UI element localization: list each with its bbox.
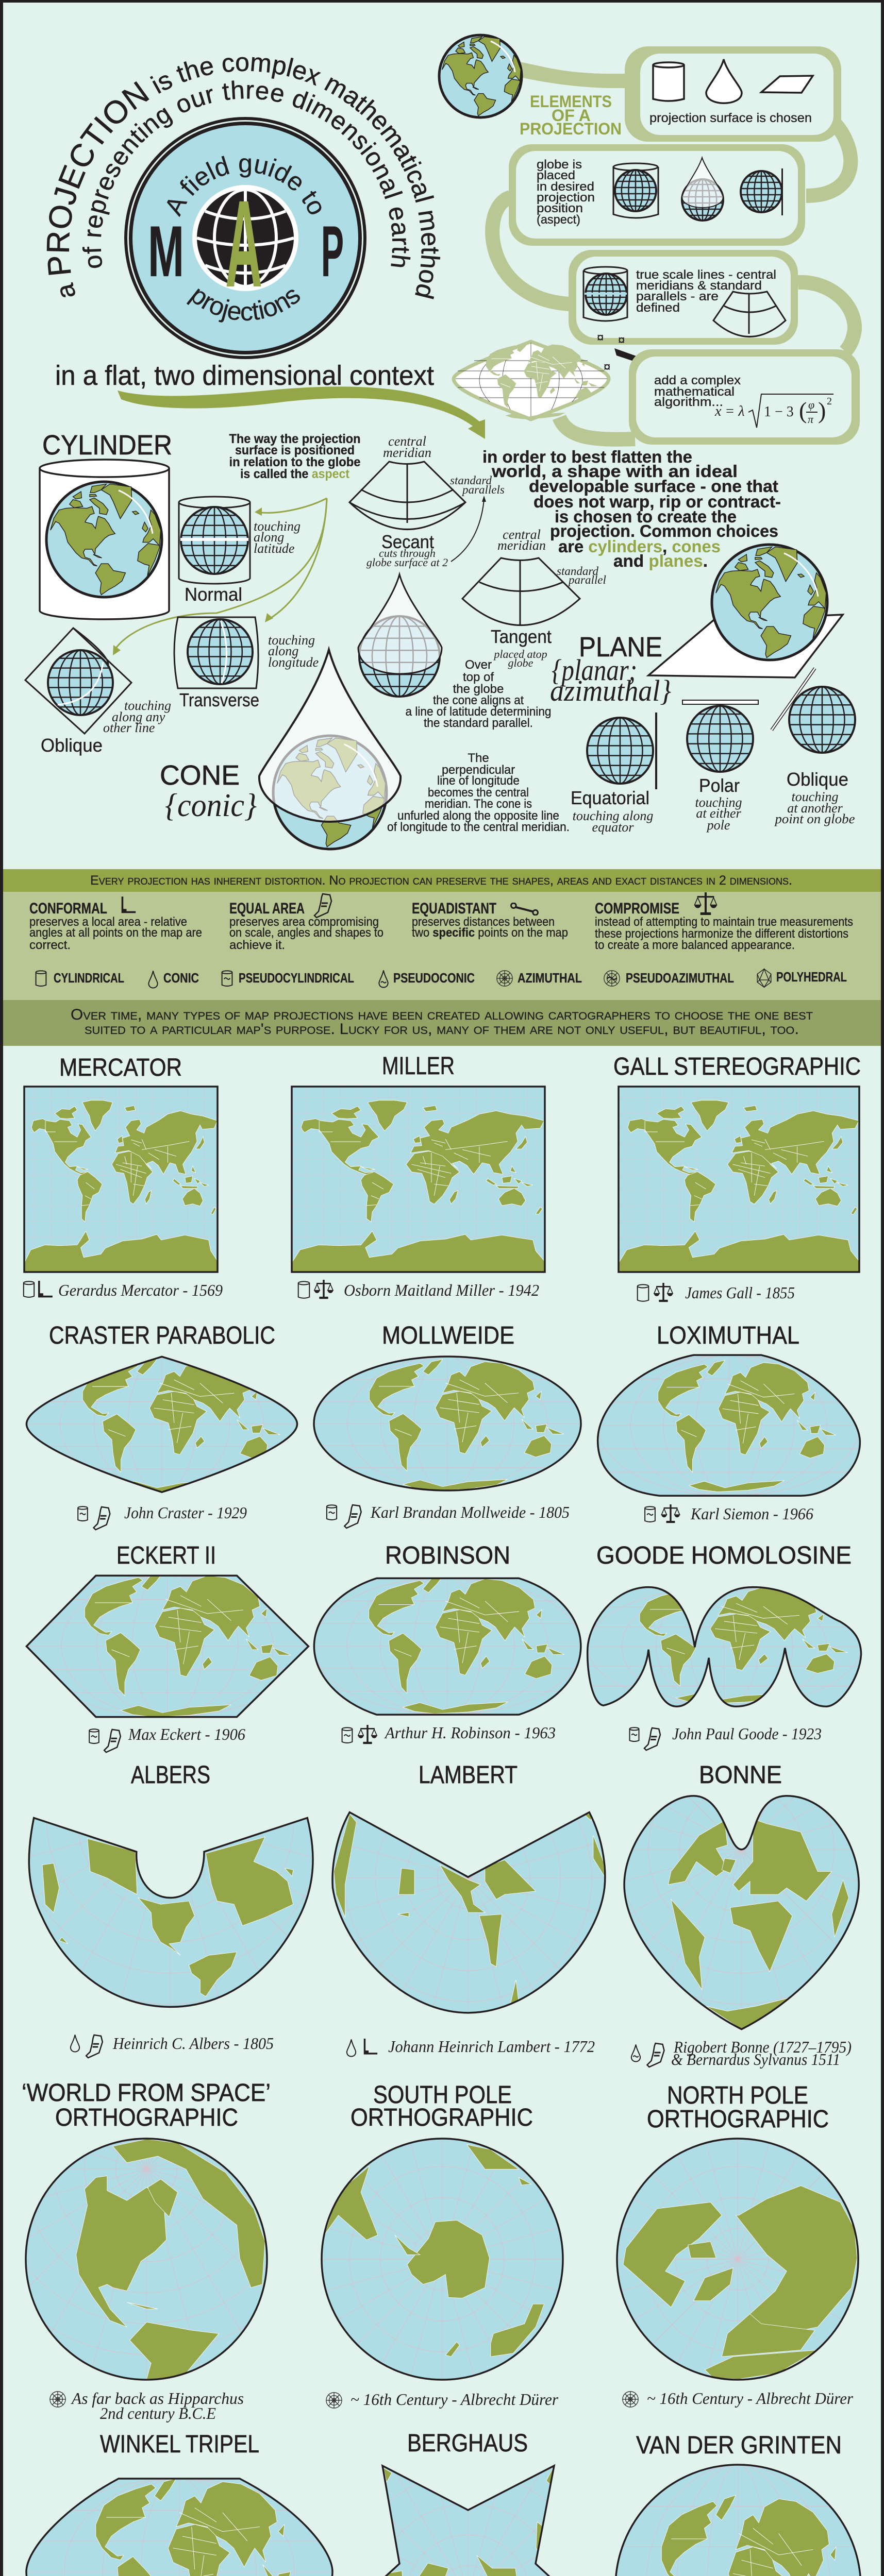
headline ending: in a flat, two dimensional context: in a flat, two dimensional context (55, 360, 434, 391)
oblique aspect: touching (124, 698, 171, 713)
compromise: to create a more balanced appearance. (595, 938, 795, 952)
panel: cone secant: central (388, 434, 426, 449)
map: mollweide (314, 1322, 581, 1528)
formula: ( (799, 397, 807, 423)
map: eckert ii (26, 1542, 309, 1752)
arrow: olive swoosh (118, 386, 485, 439)
map: goode homolosine: John Paul Goode - 1923 (672, 1724, 822, 1743)
conformal: CONFORMAL (29, 900, 107, 917)
conformal (29, 896, 202, 952)
map: bonne: & Bernardus Sylvanus 1511 (671, 2050, 840, 2069)
icon: globe in cylinder (613, 163, 658, 218)
panel: cone tangent (462, 527, 606, 669)
equatorial aspect: equator (592, 820, 634, 835)
text: aspect explanation: The way the projection (229, 432, 361, 446)
map: goode homolosine: GOODE HOMOLOSINE (596, 1542, 852, 1569)
equal area: EQUAL AREA (229, 900, 305, 917)
step text: placed (537, 168, 575, 182)
panel: cone tangent: globe (508, 656, 533, 669)
normal aspect: latitude (254, 541, 294, 556)
oblique plane aspect: at another (787, 801, 843, 816)
panel: distortion types and projection families (3, 892, 881, 1000)
map: lambert: LAMBERT (419, 1761, 518, 1789)
heading: plane: PLANE (579, 632, 662, 663)
map: north pole orthographic: ~ 16th Century - Albrecht Dürer (647, 2389, 854, 2408)
family legend: PSEUDOCYLINDRICAL (239, 970, 354, 986)
band: intro to projections (3, 1000, 881, 1046)
heading: elements of a projection (520, 92, 622, 138)
map: south pole orthographic: ~ 16th Century - Albrecht Dürer (351, 2390, 559, 2409)
family legend: POLYHEDRAL (776, 969, 847, 985)
step text: add a complex (654, 374, 741, 387)
conformal: angles at all points on the map are (29, 926, 202, 940)
map: albers (0, 1561, 428, 2076)
equatorial aspect (571, 713, 657, 835)
arrow: thin pointer to parallels (451, 496, 486, 562)
map: north pole orthographic (616, 2086, 859, 2408)
icon: sparkles and cutting pen (597, 331, 661, 374)
equal area: achieve it. (229, 938, 285, 952)
panel: cone tangent: meridian (497, 538, 546, 553)
compromise (595, 892, 853, 952)
text: aspect explanation: surface is positioned (235, 443, 355, 457)
family legend: PSEUDOCONIC (393, 970, 475, 986)
curved text: projections: projections (187, 289, 300, 323)
step text: algorithm... (654, 395, 723, 409)
heading: elements of a projection: ELEMENTS (530, 92, 612, 111)
map: world from space orthographic: ORTHOGRAPHIC (55, 2104, 238, 2131)
text: developable surface paragraph: and planes. (613, 551, 708, 570)
step text (537, 158, 595, 227)
heading: elements of a projection: OF A (552, 106, 591, 125)
title badge: a field guide to map projections (124, 117, 366, 359)
step text: true scale lines - central (636, 268, 776, 282)
text: unfurled cone: meridian. The cone is (425, 797, 532, 811)
formula: ) (818, 397, 826, 423)
family legend: PSEUDOAZIMUTHAL (626, 970, 734, 986)
step text: mathematical (654, 385, 735, 399)
step text: globe is (537, 158, 582, 172)
text: developable surface paragraph (482, 447, 781, 570)
transverse aspect: longitude (268, 655, 319, 670)
heading: elements of a projection: PROJECTION (520, 120, 622, 138)
text: developable surface paragraph: world, a shape with an ideal (491, 462, 738, 481)
panel: cone secant: globe surface at 2 (366, 556, 448, 569)
transverse aspect: Transverse (179, 689, 259, 710)
map: world from space orthographic: As far back as Hipparchus (71, 2389, 244, 2408)
map: berghaus (381, 2434, 556, 2576)
text: developable surface paragraph: developable surface - one that (529, 477, 778, 496)
text: developable surface paragraph: in order to best flatten the (482, 447, 692, 466)
polar aspect: at either (696, 806, 742, 821)
panel: plane: azimuthal} (550, 674, 671, 707)
map: craster parabolic: CRASTER PARABOLIC (49, 1322, 275, 1349)
formula: 2 (827, 396, 832, 407)
text: developable surface paragraph: are cylinders, cones (558, 537, 721, 556)
map: south pole orthographic: SOUTH POLE (373, 2081, 512, 2109)
map: winkel tripel: WINKEL TRIPEL (100, 2431, 259, 2458)
panel: plane (550, 545, 855, 835)
family legend: AZIMUTHAL (518, 970, 582, 986)
map: mercator: Gerardus Mercator - 1569 (58, 1281, 223, 1299)
map: winkel tripel (26, 2431, 332, 2576)
panel: cone secant: Secant (381, 531, 434, 552)
polar aspect: Polar (699, 775, 740, 796)
panel: cone secant: meridian (383, 445, 431, 460)
map: miller (292, 1053, 545, 1299)
transverse aspect: touching (268, 633, 315, 648)
icon: sparkles and cutting pen: ¤ (597, 331, 604, 345)
formula (714, 394, 833, 428)
family legend: CYLINDRICAL (54, 970, 124, 986)
compromise: these projections harmonize the different distortions (595, 927, 848, 941)
map: albers: ALBERS (131, 1761, 210, 1789)
map: gall stereographic (613, 1053, 861, 1302)
band: distortion statement: Every projection has inherent distortion. No projection can preserve the shapes, areas and exact distances in 2 dimensions. (90, 873, 792, 888)
equal area (229, 894, 383, 952)
step 2: globe placed (509, 144, 805, 246)
map: eckert ii: ECKERT II (116, 1542, 216, 1569)
step 3: true scale lines (569, 250, 798, 345)
map: albers: Heinrich C. Albers - 1805 (112, 2034, 274, 2053)
step text: projection (537, 191, 595, 205)
band: intro to projections: Over time, many types of map projections have been created allowing cartographers to choose the one best (71, 1006, 813, 1023)
step text: (aspect) (537, 213, 580, 227)
title badge: a field guide to map projections: P (321, 211, 344, 292)
icon: large cone over globe (259, 650, 401, 849)
transverse aspect (174, 617, 319, 710)
equidistant: preserves distances between (412, 915, 555, 929)
map: mercator (24, 1054, 223, 1299)
step text (636, 268, 776, 315)
panel: cone (160, 650, 570, 849)
map: bonne (623, 1766, 860, 2069)
icon: large cylinder with globe (40, 460, 169, 619)
curved headline line two: of representing our three dimensional earth (82, 80, 410, 268)
icon: tangent cone development (462, 558, 580, 625)
icon: sparkles and cutting pen: ¤ (618, 333, 625, 347)
map: mollweide: MOLLWEIDE (382, 1322, 514, 1349)
map: robinson: ROBINSON (385, 1542, 510, 1569)
text: cone over globe (405, 658, 552, 730)
polar aspect: pole (706, 818, 730, 833)
text: unfurled cone: perpendicular (442, 763, 515, 777)
map: van der grinten: VAN DER GRINTEN (636, 2432, 842, 2459)
icon: globe with plane (741, 168, 783, 215)
panel: cone secant: parallels (461, 483, 505, 496)
map: craster parabolic (26, 1322, 297, 1530)
oblique plane aspect: point on globe (774, 811, 855, 826)
icon: secant cone development (349, 462, 465, 530)
map: lambert (210, 1620, 726, 2136)
oblique aspect: other line (103, 720, 155, 735)
text: cone over globe: top of (463, 670, 494, 684)
panel: cone tangent: standard (557, 565, 598, 578)
text: cone over globe: Over (465, 658, 492, 672)
panel: cone secant: cuts through (379, 547, 436, 560)
text: cone over globe: the standard parallel. (424, 716, 533, 730)
oblique aspect: Oblique (41, 735, 103, 756)
arrows: aspect pointers (113, 498, 327, 655)
equidistant: two specific points on the map (412, 926, 568, 940)
step text: meridians & standard (636, 279, 762, 293)
map: world from space orthographic: ‘WORLD FROM SPACE’ (22, 2079, 271, 2107)
normal aspect (179, 497, 301, 605)
map: mollweide: Karl Brandan Mollweide - 1805 (370, 1503, 570, 1521)
map: miller: MILLER (382, 1053, 455, 1080)
normal aspect: along (254, 530, 284, 545)
map: world from space orthographic (23, 2083, 270, 2422)
equidistant (412, 900, 568, 940)
icon: cylinder (653, 62, 684, 101)
text: aspect explanation (229, 432, 361, 481)
heading: cylinder: CYLINDER (42, 430, 172, 461)
text: developable surface paragraph: projection. Common choices (550, 521, 778, 540)
map: robinson: Arthur H. Robinson - 1963 (384, 1723, 556, 1742)
formula: x = λ (714, 403, 744, 419)
transverse aspect: along (268, 643, 298, 658)
icon: globe in cone (682, 158, 723, 221)
text: unfurled cone: becomes the central (428, 786, 529, 800)
formula: φ (808, 398, 814, 411)
step 4: mathematical algorithm (629, 349, 860, 445)
map: berghaus: BERGHAUS (407, 2430, 528, 2457)
conformal: preserves a local area - relative (29, 915, 187, 929)
step text: defined (636, 301, 680, 315)
map: bonne: BONNE (699, 1761, 782, 1789)
band: intro to projections: suited to a particular map's purpose. Lucky for us, many of them are not only useful, but beautiful, too. (85, 1021, 799, 1038)
panel: cone tangent: placed atop (493, 648, 547, 660)
text: unfurled cone: line of longitude (437, 774, 520, 788)
equatorial aspect: Equatorial (571, 787, 649, 808)
oblique aspect (25, 628, 171, 756)
step text (654, 374, 741, 409)
panel: elements of a projection (439, 35, 860, 445)
icon: developed cone (713, 292, 786, 337)
panel: cylinder (25, 430, 361, 756)
text: unfurled cone: The (468, 751, 489, 765)
icon: gridded globe in cone (358, 574, 442, 697)
family legend (36, 969, 847, 988)
normal aspect: Normal (185, 584, 242, 605)
text: unfurled cone: unfurled along the opposite line (397, 809, 559, 823)
map: mercator: MERCATOR (59, 1054, 182, 1081)
step text: position (537, 201, 583, 215)
step text: parallels - are (636, 290, 719, 303)
band: distortion statement (3, 869, 881, 892)
icon: elements globe (439, 35, 522, 117)
letter M: M (148, 211, 184, 292)
step text: in desired (537, 180, 594, 194)
equatorial aspect: touching along (573, 808, 653, 823)
text: cone over globe: the globe (453, 682, 504, 696)
map: fuller (0, 2562, 449, 2576)
icon: cone (706, 59, 742, 103)
map: south pole orthographic: ORTHOGRAPHIC (351, 2104, 533, 2131)
map: north pole orthographic: NORTH POLE (667, 2082, 808, 2109)
map: loximuthal: Karl Siemon - 1966 (690, 1504, 813, 1523)
equidistant: EQUADISTANT (412, 900, 496, 917)
panel: cone: {conic} (165, 787, 257, 823)
polar aspect: touching (695, 795, 742, 810)
oblique plane aspect (772, 668, 855, 826)
compromise: COMPROMISE (595, 900, 679, 917)
oblique aspect: along any (112, 709, 165, 724)
curved headline line one: a PROJECTION is the complex mathematical method (46, 57, 440, 299)
equal area: on scale, angles and shapes to (229, 926, 383, 940)
map: eckert ii: Max Eckert - 1906 (128, 1725, 245, 1743)
map: robinson (313, 1542, 581, 1744)
icon: globe in cylinder with blue line (583, 267, 627, 321)
step text: projection surface is chosen (649, 111, 812, 125)
heading: cone: CONE (160, 760, 240, 791)
oblique plane aspect: Oblique (787, 769, 848, 790)
map: south pole orthographic (321, 2086, 564, 2409)
text: aspect explanation: in relation to the globe (229, 455, 361, 469)
map: van der grinten (615, 2432, 861, 2576)
map: bonne: Rigobert Bonne (1727–1795) (673, 2038, 852, 2056)
text: unfurled cone (387, 751, 570, 834)
map: loximuthal: LOXIMUTHAL (657, 1322, 799, 1349)
formula: 1 − 3 (764, 404, 794, 420)
icon: plane under globe (648, 545, 843, 677)
compromise: instead of attempting to maintain true measurements (595, 915, 853, 929)
panel: cone tangent: parallel (568, 573, 606, 586)
map: flat world being cut (454, 342, 609, 419)
panel: cone tangent: Tangent (491, 626, 552, 647)
text: developable surface paragraph: is chosen to create the (555, 507, 737, 526)
family legend: CONIC (163, 970, 199, 986)
oblique plane aspect: touching (792, 789, 838, 804)
icon: sparkles and cutting pen: ¤ (604, 360, 610, 374)
text: unfurled cone: of longitude to the central meridian. (387, 820, 570, 834)
conformal: correct. (29, 938, 71, 952)
panel: cone secant: standard (450, 474, 492, 487)
text: developable surface paragraph: does not warp, rip or contract- (533, 492, 781, 511)
map: miller: Osborn Maitland Miller - 1942 (344, 1281, 539, 1299)
icon: plane (761, 76, 813, 93)
curved text: a field guide to: A field guide to (167, 156, 322, 217)
formula: π (808, 413, 814, 426)
step 1: projection surface (625, 46, 841, 142)
map: world from space orthographic: 2nd century B.C.E (100, 2404, 216, 2422)
map: craster parabolic: John Craster - 1929 (124, 1503, 247, 1522)
map: north pole orthographic: ORTHOGRAPHIC (647, 2106, 829, 2133)
text: cone over globe: a line of latitude determining (405, 705, 552, 719)
map: loximuthal (598, 1322, 860, 1523)
panel: cone tangent: central (503, 527, 541, 542)
equal area: preserves area compromising (229, 915, 379, 929)
text: aspect explanation: is called the aspect (240, 467, 350, 481)
polar aspect (682, 700, 758, 833)
map: gall stereographic: James Gall - 1855 (685, 1283, 795, 1302)
title badge: a field guide to map projections: A (225, 175, 262, 313)
connectors between steps (492, 62, 855, 439)
normal aspect: touching (254, 519, 301, 534)
panel: plane: {planar; (552, 653, 637, 687)
map: lambert: Johann Heinrich Lambert - 1772 (388, 2037, 595, 2056)
text: cone over globe: the cone aligns at (433, 693, 524, 707)
map: goode homolosine (588, 1542, 861, 1750)
badge globe (192, 185, 298, 291)
panel: cone secant (349, 434, 505, 569)
